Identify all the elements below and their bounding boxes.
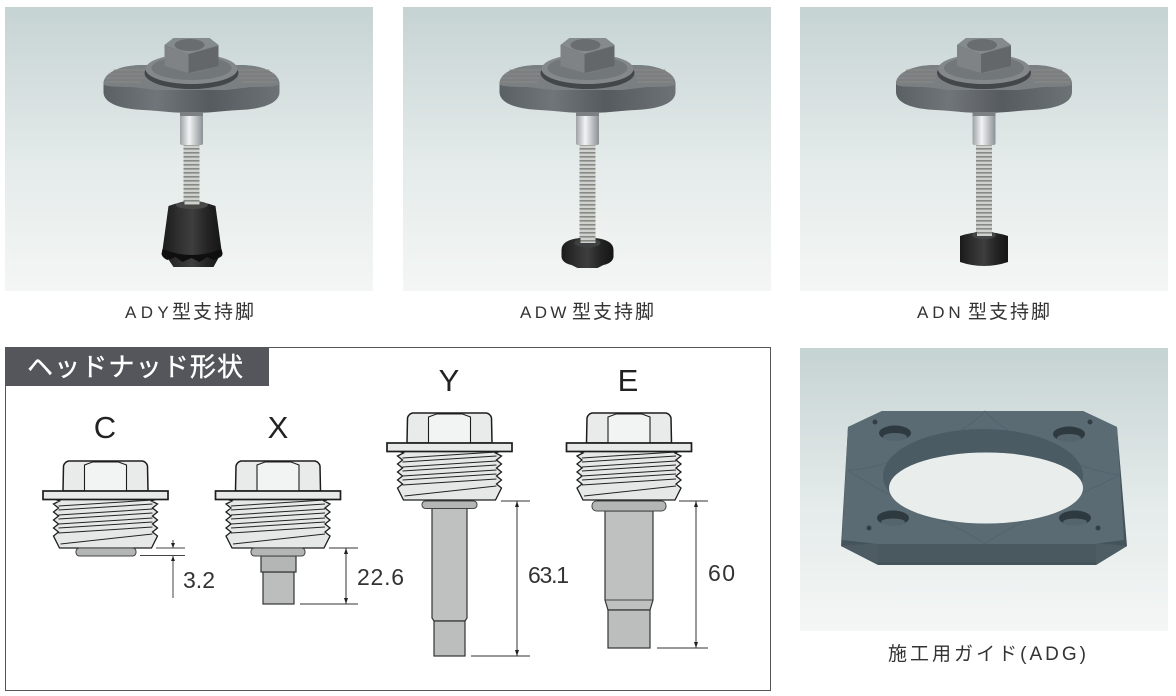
caption: ADW: ADW (520, 303, 570, 322)
caption: ADY: 型支持脚 (172, 301, 256, 323)
head nut X: X (268, 410, 289, 445)
head nut E: E (618, 363, 638, 398)
heading bar: ヘッドナッド形状 (27, 352, 243, 382)
caption: ADW: 型支持脚 (572, 301, 656, 323)
head nut X (216, 410, 404, 604)
panel: construction guide photo (800, 348, 1168, 631)
caption: ADN: ADN (917, 303, 965, 322)
icon: ADY leg (104, 38, 280, 267)
head nut X: 22.6 (357, 564, 404, 590)
head nut Y: Y (439, 363, 459, 398)
head nut C: C (94, 410, 116, 445)
head nut C (43, 410, 215, 598)
heading bar (5, 347, 269, 386)
icon: ADW leg (500, 38, 676, 268)
caption: guide: 施工用ガイド(ADG) (888, 643, 1086, 665)
head nut Y (387, 363, 569, 656)
head nut C: 3.2 (183, 567, 215, 593)
panel: ADY support leg photo (5, 7, 373, 291)
icon: ADN leg (896, 38, 1072, 266)
panel: ADW support leg photo (403, 7, 771, 291)
head nut Y: 63.1 (528, 562, 569, 588)
head nut E (566, 363, 735, 648)
panel: ADN support leg photo (800, 7, 1168, 291)
icon: guide plate (841, 411, 1127, 565)
caption: ADY: ADY (125, 303, 173, 322)
head nut E: 60 (708, 560, 735, 586)
caption: ADN: 型支持脚 (968, 301, 1052, 323)
panel: head nut shapes (5, 347, 770, 690)
